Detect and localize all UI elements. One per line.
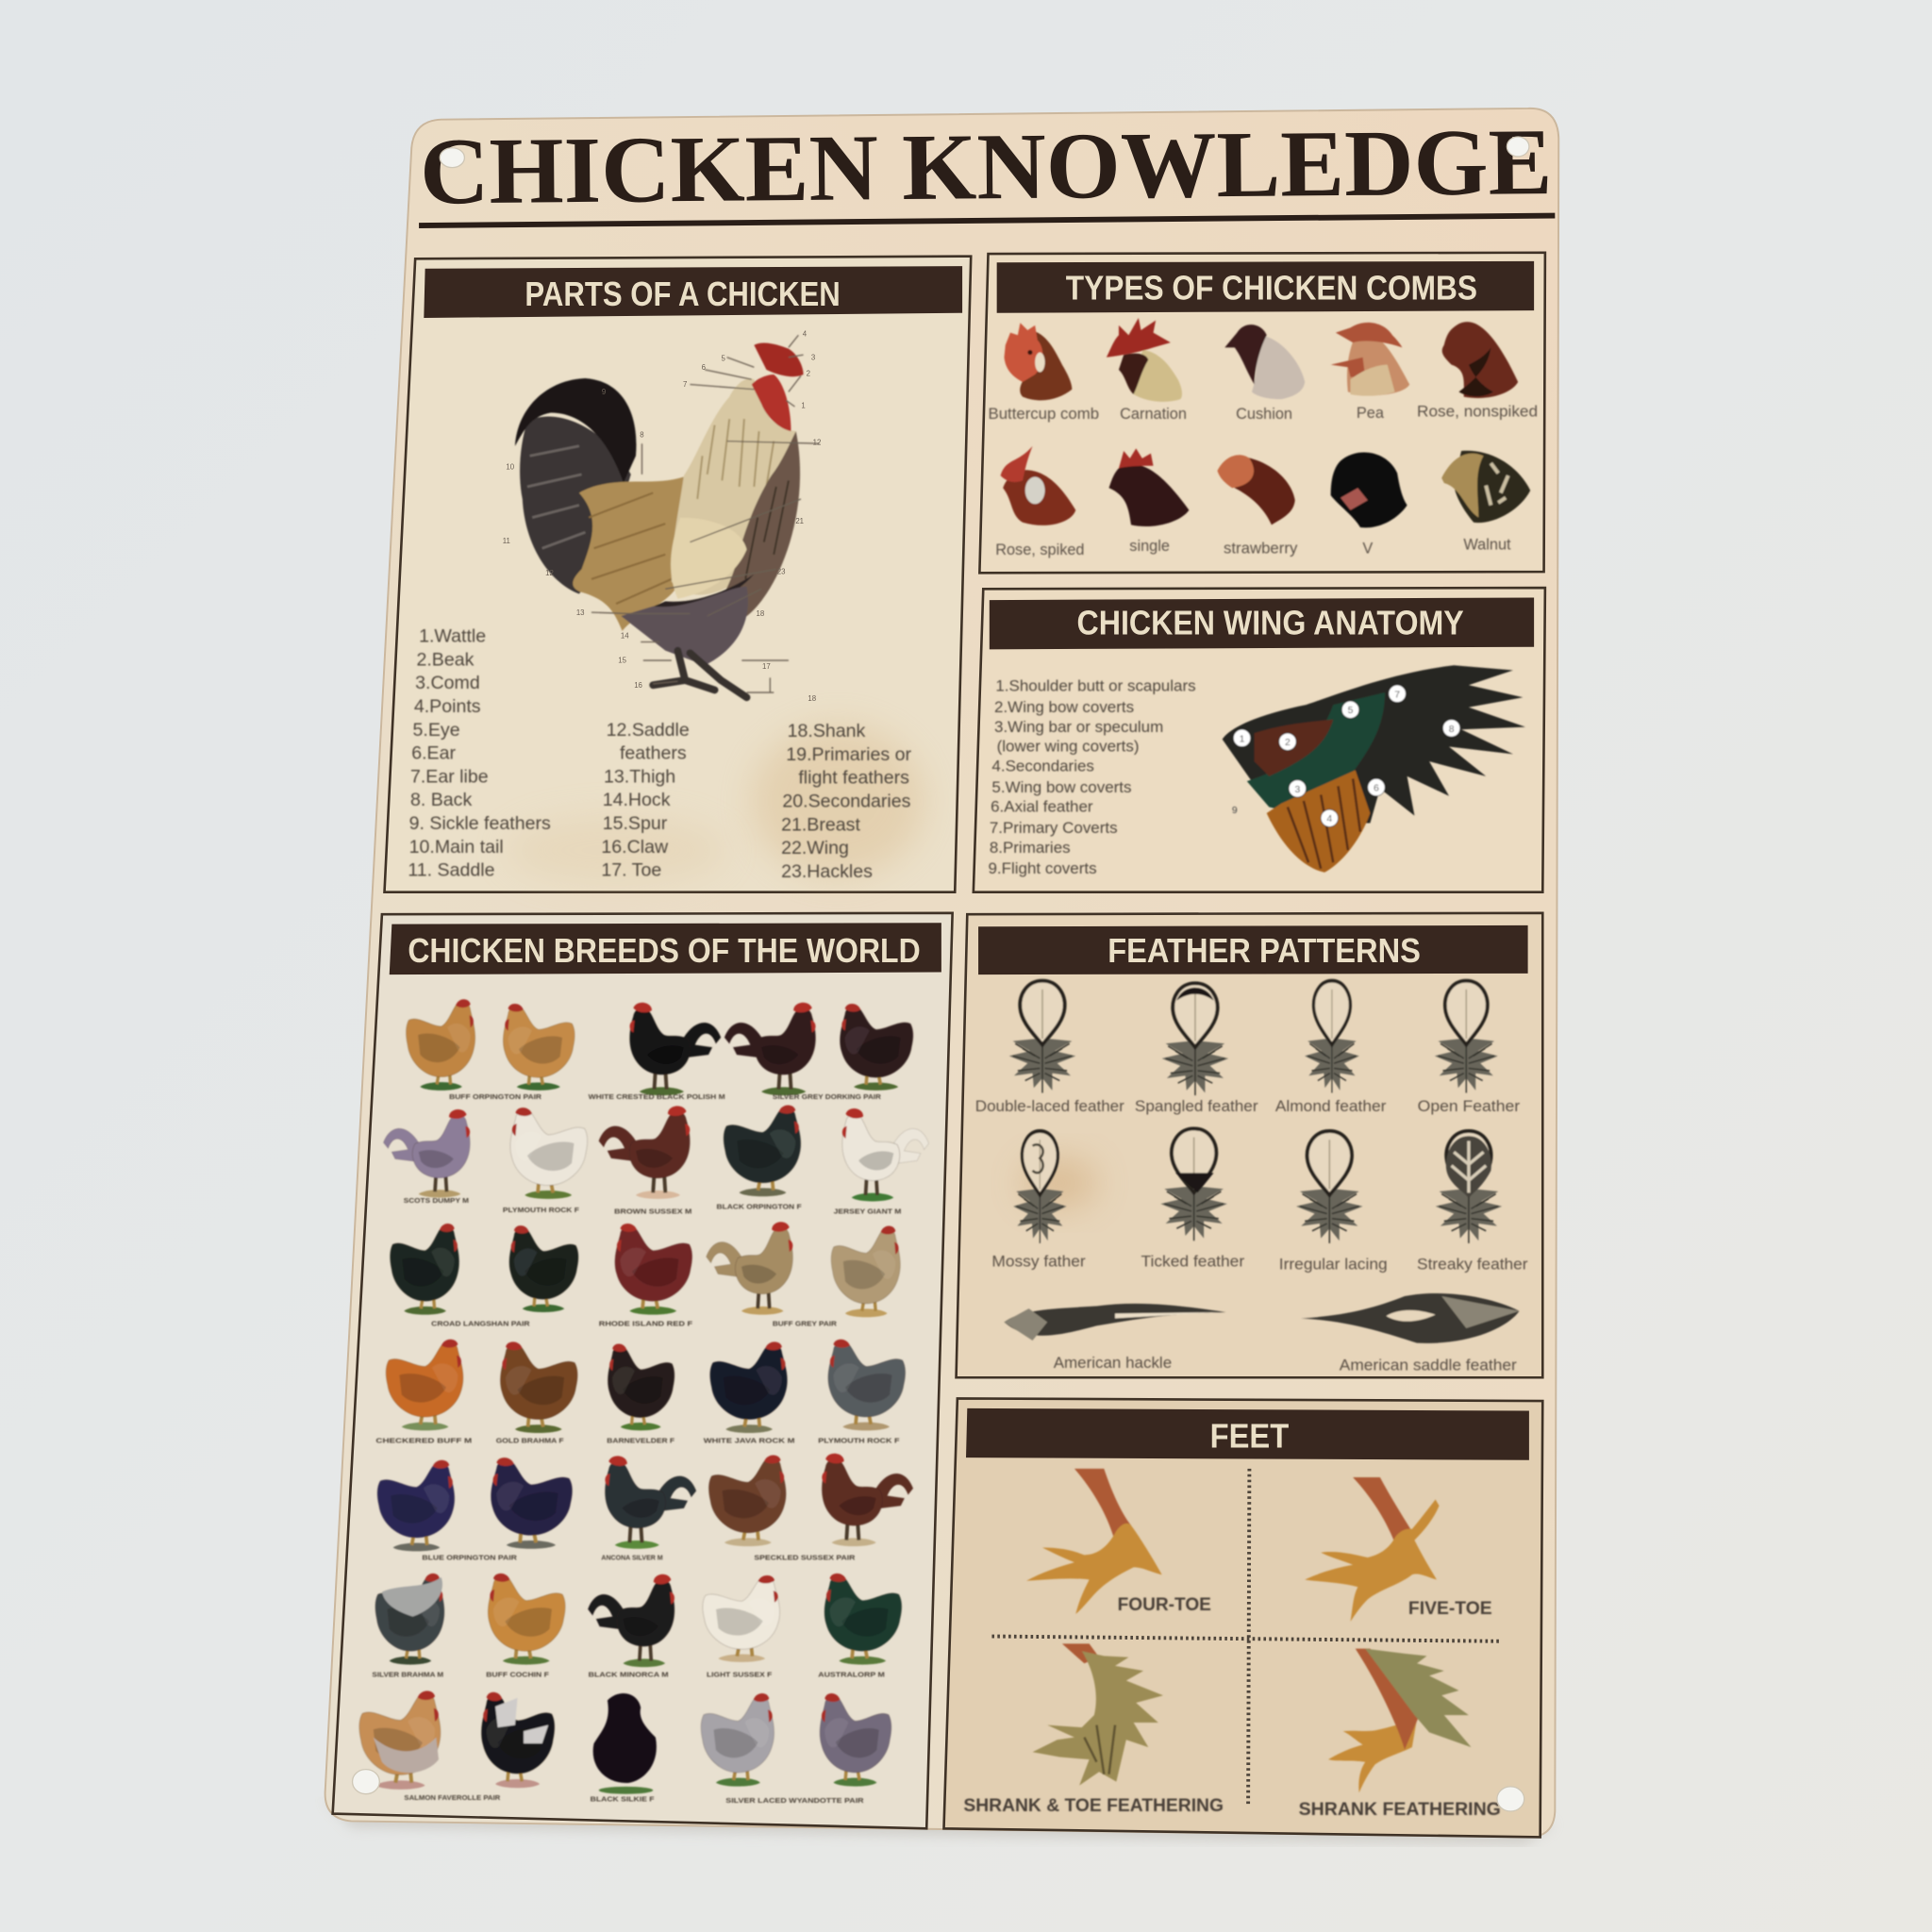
panel: feet xyxy=(943,1398,1542,1837)
comb labels: Buttercup comb xyxy=(989,406,1099,423)
feather: spangled: Spangled feather xyxy=(1135,1097,1258,1115)
comb labels: single xyxy=(1129,538,1170,555)
breed: dark hen xyxy=(607,1343,675,1444)
wing text list: 4.Secondaries xyxy=(991,758,1094,775)
callout numbers: 12 xyxy=(545,569,554,577)
breed: tan rooster xyxy=(707,1222,838,1327)
breed: scots dumpy: SCOTS DUMPY M xyxy=(404,1197,469,1205)
feather: mossy: Mossy father xyxy=(991,1253,1086,1271)
feather: double-laced: Double-laced feather xyxy=(975,1097,1124,1115)
feather: open xyxy=(1418,981,1520,1115)
callout numbers: 9 xyxy=(602,388,606,396)
comb labels: strawberry xyxy=(1224,540,1298,557)
heading: chicken breeds of the world: CHICKEN BREEDS OF THE WORLD xyxy=(408,931,921,970)
callout numbers: 12 xyxy=(813,439,821,447)
breed: black minorca xyxy=(588,1574,675,1679)
parts list: column 1: 10.Main tail xyxy=(409,837,504,858)
feather: american hackle xyxy=(1004,1304,1226,1372)
wing text list: (lower wing coverts) xyxy=(997,738,1140,756)
callout numbers: 6 xyxy=(702,363,707,372)
parts list: column 2: 13.Thigh xyxy=(604,766,675,787)
heading: feet: FEET xyxy=(1210,1417,1289,1456)
panel: types of chicken combs xyxy=(979,253,1545,573)
feather: irregular lacing xyxy=(1279,1131,1388,1273)
foot: five-toe xyxy=(1305,1477,1492,1622)
parts list: column 1: 4.Points xyxy=(414,696,481,717)
feather: spangled xyxy=(1135,983,1258,1115)
metal sign xyxy=(325,108,1558,1837)
feather: streaky: Streaky feather xyxy=(1417,1255,1528,1273)
callout numbers: 2 xyxy=(807,369,810,377)
wing number markers: 7 xyxy=(1394,690,1400,700)
wing text list xyxy=(989,677,1196,877)
breed: brown sussex xyxy=(599,1106,691,1216)
panel: parts of a chicken xyxy=(385,257,971,892)
illustration: wing xyxy=(1223,665,1525,873)
feather: irregular lacing: Irregular lacing xyxy=(1279,1255,1388,1273)
wing number markers: 8 xyxy=(1449,724,1455,735)
breed: dark hen: BARNEVELDER F xyxy=(607,1437,675,1444)
parts list: column 1: 9. Sickle feathers xyxy=(409,813,551,834)
breed: buff cochin xyxy=(486,1574,565,1679)
comb: strawberry xyxy=(1217,455,1295,525)
parts list: column 3 xyxy=(781,721,912,882)
breed: australorp xyxy=(818,1574,902,1679)
breed: black silkie xyxy=(591,1693,657,1804)
wing text list: 6.Axial feather xyxy=(991,798,1093,816)
breed: silver gray xyxy=(372,1574,444,1679)
parts list: column 1: 1.Wattle xyxy=(419,625,486,646)
comb labels: Pea xyxy=(1357,405,1385,422)
breed: black orpington: BLACK ORPINGTON F xyxy=(717,1203,802,1210)
wing number markers: 4 xyxy=(1326,814,1332,824)
heading: parts of a chicken xyxy=(424,266,962,318)
breed: grey purple hen xyxy=(820,1693,891,1787)
panel: feather patterns xyxy=(957,913,1542,1377)
parts list: column 1: 5.Eye xyxy=(413,720,460,741)
parts list: column 2: feathers xyxy=(620,743,687,764)
comb: pea xyxy=(1331,323,1409,396)
comb labels xyxy=(989,403,1538,558)
heading: feet xyxy=(966,1408,1529,1460)
comb: carnation xyxy=(1107,318,1182,402)
title: CHICKEN KNOWLEDGE xyxy=(420,108,1553,225)
breed: speckled sussex hen xyxy=(708,1455,856,1562)
callout numbers: 17 xyxy=(762,662,771,671)
heading: feather patterns: FEATHER PATTERNS xyxy=(1108,931,1421,970)
breed: australorp: AUSTRALORP M xyxy=(818,1672,885,1679)
breed: silver laced wyandotte: SILVER LACED WYANDOTTE PAIR xyxy=(725,1797,865,1805)
wing number markers: 5 xyxy=(1348,706,1354,716)
breed: jersey giant xyxy=(834,1108,929,1216)
heading: chicken wing anatomy: CHICKEN WING ANATOMY xyxy=(1077,604,1464,642)
parts list: column 3: 22.Wing xyxy=(781,838,849,858)
heading: parts of a chicken: PARTS OF A CHICKEN xyxy=(525,275,841,313)
parts list: column 1: 11. Saddle xyxy=(408,860,495,881)
parts list: column 1: 6.Ear xyxy=(411,743,457,764)
wing text list: 8.Primaries xyxy=(990,839,1071,857)
wing number markers xyxy=(1232,685,1460,826)
breed: buff orpington pair, first bird xyxy=(407,999,542,1101)
comb labels: Walnut xyxy=(1463,537,1511,554)
heading: types of chicken combs xyxy=(997,261,1534,313)
parts list: column 2: 14.Hock xyxy=(603,790,671,810)
callout numbers: 13 xyxy=(576,608,585,617)
breed: blue orpington pair, first bird: BLUE ORPINGTON PAIR xyxy=(422,1555,518,1562)
callout numbers: 1 xyxy=(801,401,806,409)
dotted dividers xyxy=(991,1469,1500,1805)
breed: blue orpington pair, second bird xyxy=(491,1457,573,1549)
breed: brown sussex: BROWN SUSSEX M xyxy=(614,1208,691,1216)
breed: scots dumpy xyxy=(383,1109,470,1205)
breed: buff cochin: BUFF COCHIN F xyxy=(486,1672,550,1679)
callout numbers: 16 xyxy=(634,681,643,690)
foot: shank and toe feathering: SHRANK & TOE FEATHERING xyxy=(963,1795,1224,1816)
callout numbers: 14 xyxy=(621,632,629,641)
parts list: column 2 xyxy=(601,720,690,881)
feather: american saddle xyxy=(1301,1293,1519,1374)
callout numbers: 10 xyxy=(506,463,515,472)
parts list: column 3: 21.Breast xyxy=(781,814,860,835)
breed: columbian buff: CHECKERED BUFF M xyxy=(375,1437,472,1444)
callout numbers: 11 xyxy=(503,537,510,545)
callout numbers xyxy=(503,330,821,703)
breed: jersey giant: JERSEY GIANT M xyxy=(834,1208,901,1216)
breed: dark rooster xyxy=(601,1456,696,1562)
callout numbers: 3 xyxy=(811,353,816,361)
heading: types of chicken combs: TYPES OF CHICKEN COMBS xyxy=(1066,268,1477,307)
comb labels: V xyxy=(1362,540,1373,557)
breed: buff orpington pair, first bird: BUFF ORPINGTON PAIR xyxy=(449,1093,542,1101)
comb: walnut xyxy=(1441,451,1530,523)
wing text list: 7.Primary Coverts xyxy=(990,819,1118,837)
breed: black orpington xyxy=(717,1106,802,1210)
parts list: column 3: 18.Shank xyxy=(788,721,866,741)
breed: silver laced wyandotte xyxy=(701,1693,865,1805)
feather: american hackle: American hackle xyxy=(1054,1354,1172,1372)
breed: rhode island red: RHODE ISLAND RED F xyxy=(599,1320,693,1327)
heading: chicken wing anatomy xyxy=(990,597,1534,649)
illustration: rooster with numbered callouts xyxy=(515,335,820,697)
feather: open: Open Feather xyxy=(1418,1097,1520,1115)
comb: single xyxy=(1109,448,1189,526)
callout numbers: 18 xyxy=(808,694,817,703)
panel: chicken breeds of the world xyxy=(333,913,953,1828)
breed: plymouth rock grey: PLYMOUTH ROCK F xyxy=(818,1437,900,1444)
parts list: column 1: 8. Back xyxy=(410,790,472,810)
foot: shank feathering xyxy=(1299,1649,1501,1820)
feather: double-laced xyxy=(975,981,1124,1115)
feather: streaky xyxy=(1417,1131,1528,1273)
parts list: column 3: 20.Secondaries xyxy=(782,791,911,812)
comb: V xyxy=(1331,453,1407,527)
foot: shank and toe feathering xyxy=(963,1643,1224,1816)
comb labels: Rose, spiked xyxy=(995,541,1085,558)
breed: light sussex xyxy=(703,1575,780,1679)
comb: buttercup xyxy=(1004,323,1072,400)
callout numbers: 5 xyxy=(722,355,726,363)
mounting holes xyxy=(353,137,1529,1811)
callout numbers: 4 xyxy=(803,330,808,339)
parts list: column 3: 19.Primaries or xyxy=(786,744,912,765)
comb: rose, nonspiked xyxy=(1442,322,1518,398)
breed: plymouth rock grey xyxy=(818,1340,906,1444)
feather: mossy xyxy=(991,1131,1086,1271)
breed: cochin, green black, second bird xyxy=(509,1225,578,1312)
feather: ticked: Ticked feather xyxy=(1141,1253,1245,1271)
callout numbers: 7 xyxy=(683,380,687,389)
panel: chicken wing anatomy xyxy=(974,588,1545,892)
parts list: column 2: 17. Toe xyxy=(601,860,661,881)
breed: blue orpington pair, first bird xyxy=(377,1460,518,1562)
feather: almond: Almond feather xyxy=(1275,1097,1387,1115)
foot: five-toe: FIVE-TOE xyxy=(1408,1598,1492,1619)
breed: cochin, green black, first bird xyxy=(391,1224,531,1327)
heading: chicken breeds of the world xyxy=(390,923,941,974)
wing text list: 2.Wing bow coverts xyxy=(994,698,1134,716)
breed: rooster, maroon: SILVER GREY DORKING PAIR xyxy=(773,1093,882,1101)
parts list: column 1: 2.Beak xyxy=(416,649,475,670)
callout numbers: 21 xyxy=(795,517,804,525)
wing number markers: 2 xyxy=(1285,738,1291,748)
breed: buff orpington pair, second bird xyxy=(503,1004,575,1091)
feather: american saddle: American saddle feather xyxy=(1340,1356,1517,1374)
wing text list: 3.Wing bar or speculum xyxy=(994,718,1163,736)
breed: black and white bird xyxy=(481,1692,555,1788)
breed: rhode island black: WHITE JAVA ROCK M xyxy=(704,1437,794,1444)
feather: almond xyxy=(1275,981,1387,1115)
breed: black minorca: BLACK MINORCA M xyxy=(589,1672,669,1679)
breed: hen, dark maroon xyxy=(840,1004,913,1091)
wing number markers: 1 xyxy=(1240,734,1245,744)
breed: plymouth rock xyxy=(503,1108,588,1214)
feather: ticked xyxy=(1141,1128,1245,1271)
foot: four-toe: FOUR-TOE xyxy=(1118,1594,1211,1615)
breed: speckled sussex hen: SPECKLED SUSSEX PAIR xyxy=(754,1555,856,1562)
breed: white crested black polish: WHITE CRESTED BLACK POLISH M xyxy=(589,1093,725,1101)
callout numbers: 23 xyxy=(777,568,786,576)
parts list: column 3: 23.Hackles xyxy=(781,861,873,882)
heading: feather patterns xyxy=(978,925,1528,974)
breed: rhode island red xyxy=(599,1224,693,1327)
breed: white crested black polish xyxy=(589,1003,725,1101)
breed: tan rooster: BUFF GREY PAIR xyxy=(773,1320,838,1327)
parts list: column 2: 15.Spur xyxy=(603,813,668,834)
foot: shank feathering: SHRANK FEATHERING xyxy=(1299,1799,1501,1820)
parts list: column 1 xyxy=(408,625,551,881)
wing text list: 1.Shoulder butt or scapulars xyxy=(995,677,1196,695)
breed: plymouth rock: PLYMOUTH ROCK F xyxy=(503,1207,580,1214)
breed: black silkie: BLACK SILKIE F xyxy=(591,1796,655,1804)
callout numbers: 8 xyxy=(640,431,644,440)
comb labels: Cushion xyxy=(1236,406,1292,423)
parts list: column 3: flight feathers xyxy=(798,768,909,789)
comb labels: Rose, nonspiked xyxy=(1417,403,1538,420)
breed: salmon faverolle xyxy=(359,1690,501,1802)
wing text list: 9.Flight coverts xyxy=(989,859,1097,877)
comb: cushion xyxy=(1224,325,1305,399)
comb: rose, spiked xyxy=(1001,446,1075,525)
parts list: column 1: 3.Comd xyxy=(415,673,480,693)
callout numbers: 15 xyxy=(618,657,627,665)
breed: rooster, maroon xyxy=(724,1003,882,1101)
wing text list: 5.Wing bow coverts xyxy=(991,778,1131,796)
foot: four-toe xyxy=(1026,1469,1211,1615)
breed: gold brahma: GOLD BRAHMA F xyxy=(496,1437,564,1444)
breed: speckled sussex cock xyxy=(822,1454,913,1546)
title rule xyxy=(419,216,1555,225)
callout numbers: 18 xyxy=(757,609,765,618)
breed: cochin, green black, first bird: CROAD LANGSHAN PAIR xyxy=(431,1320,531,1327)
parts list: column 2: 16.Claw xyxy=(601,837,669,858)
breed: rhode island black xyxy=(704,1341,794,1444)
breed: light sussex: LIGHT SUSSEX F xyxy=(707,1672,773,1679)
parts list: column 1: 7.Ear libe xyxy=(410,766,489,787)
breed: salmon faverolle: SALMON FAVEROLLE PAIR xyxy=(404,1794,501,1802)
breed: gold brahma xyxy=(496,1341,577,1444)
breed: tan hen xyxy=(831,1226,900,1317)
breed: silver gray: SILVER BRAHMA M xyxy=(372,1672,443,1679)
breed: columbian buff xyxy=(375,1340,472,1444)
wing number markers: 3 xyxy=(1294,785,1300,795)
comb labels: Carnation xyxy=(1120,406,1187,423)
parts list: column 2: 12.Saddle xyxy=(607,720,690,741)
breed: dark rooster: ANCONA SILVER M xyxy=(601,1555,663,1562)
wing number markers: 6 xyxy=(1374,784,1379,794)
wing number markers: 9 xyxy=(1232,806,1238,816)
